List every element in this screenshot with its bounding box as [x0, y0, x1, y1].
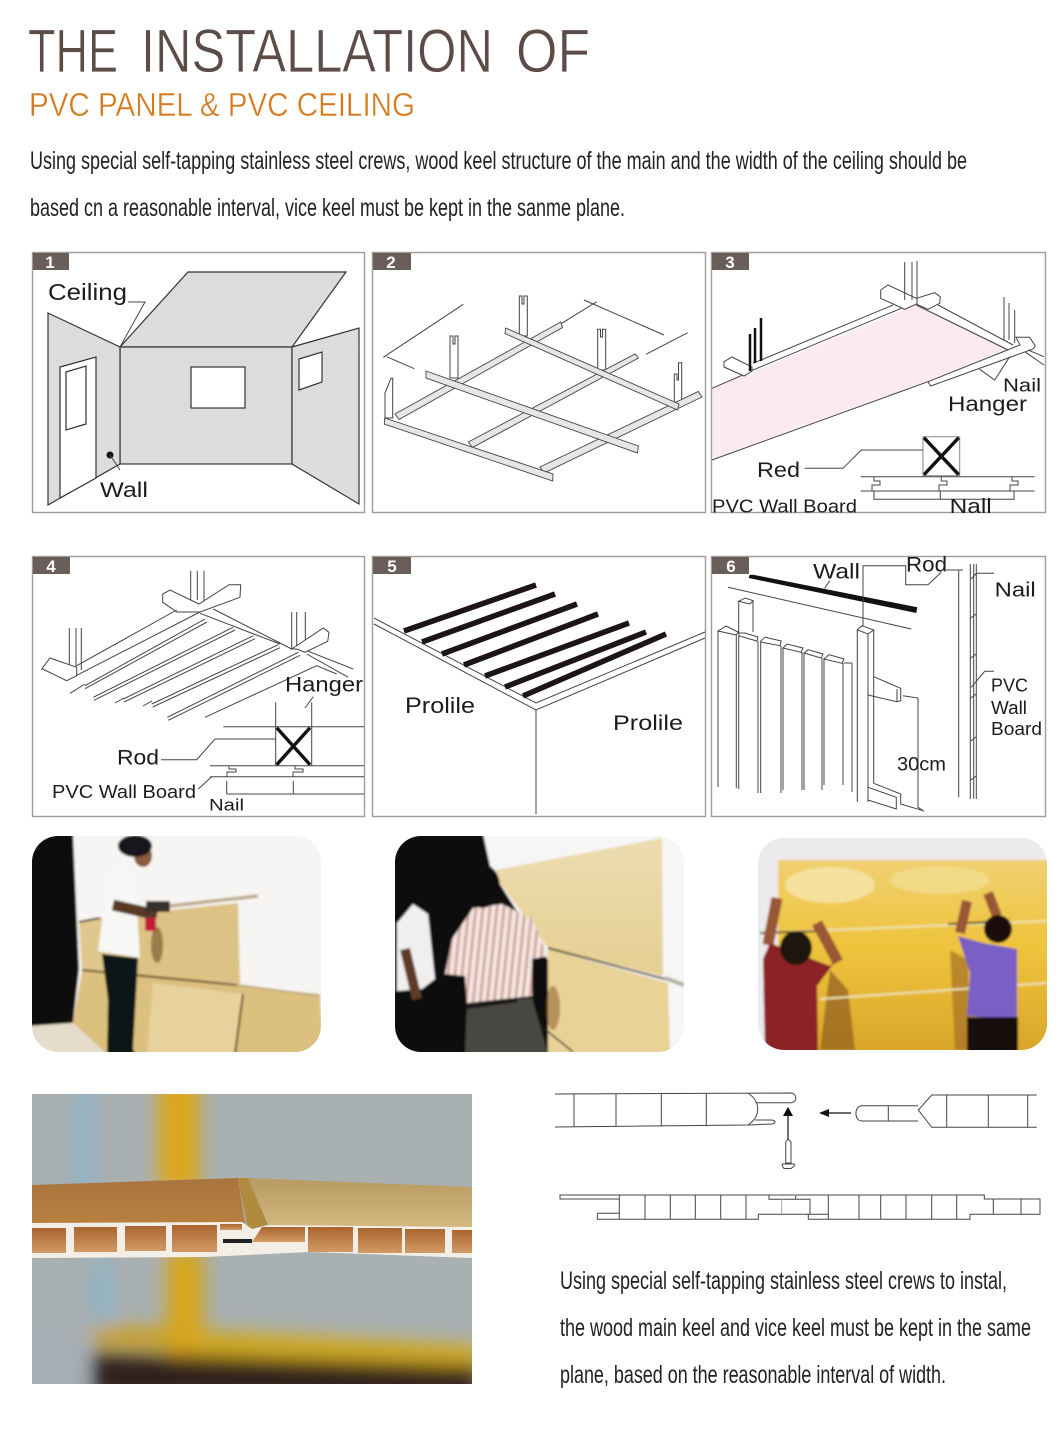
profile joint diagram: [555, 1093, 1037, 1168]
panel 4: hanger and rods: 4: [46, 557, 56, 576]
panel 1: room diagram: Wall: [100, 479, 148, 502]
closing text: [560, 1267, 1031, 1389]
assembled profile diagram: [560, 1195, 1040, 1219]
intro text: [30, 147, 967, 222]
arrow: up with screw: [782, 1107, 794, 1168]
photo: two workers on yellow wall: [756, 836, 1049, 1052]
panel 3: ceiling board with hanger: Nail: [1003, 376, 1041, 396]
title: INSTALLATION: [141, 17, 493, 85]
panel 1: room diagram: Ceiling: [48, 279, 127, 305]
panel 5: profile rods: Prolile: [613, 712, 683, 735]
photo: two workers fitting panel: [393, 834, 686, 1054]
title: OF: [516, 17, 590, 85]
panel 5: profile rods: 5: [387, 557, 397, 576]
panel 3: ceiling board with hanger: Hanger: [948, 393, 1027, 416]
panel 3: ceiling board with hanger: PVC Wall Board: [712, 497, 857, 517]
panel 6: wall battens: 6: [726, 557, 736, 576]
panel 1: room diagram: 1: [45, 253, 55, 272]
arrow: left: [819, 1109, 851, 1117]
panel 2: ceiling grid: [372, 252, 706, 512]
panel 3: ceiling board with hanger: [712, 252, 1046, 518]
panel 4: hanger and rods: [32, 556, 364, 816]
panel 5: profile rods: [372, 556, 706, 816]
panel 6: wall battens: Wall: [991, 698, 1027, 718]
cross-section of rod and board: [161, 697, 364, 794]
panel 6: wall battens: PVC: [991, 676, 1028, 696]
panel 1: room diagram: [32, 252, 364, 512]
subtitle: PVC PANEL & PVC CEILING: [29, 86, 415, 123]
photo: panel cross-section close-up: [32, 1094, 472, 1384]
panel 5: profile rods: Prolile: [405, 693, 475, 718]
photo: worker drilling panel: [30, 834, 323, 1054]
panel 4: hanger and rods: Hanger: [285, 673, 363, 696]
panel 3: ceiling board with hanger: 3: [725, 253, 735, 272]
panel 2: ceiling grid: 2: [386, 253, 396, 272]
panel 6: wall battens: [712, 554, 1046, 816]
panel 3: ceiling board with hanger: Nall: [950, 496, 992, 518]
panel 6: wall battens: Wall: [813, 560, 860, 583]
panel 4: hanger and rods: Rod: [117, 747, 159, 770]
panel 4: hanger and rods: Nail: [209, 796, 244, 815]
panel 6: wall battens: 30cm: [897, 755, 946, 776]
intro text: based cn a reasonable interval, vice keel must be kept in the sanme plane.: [30, 194, 625, 222]
cross-section of rod and board: [805, 437, 1035, 499]
panel 6: wall battens: Nail: [995, 580, 1036, 602]
panel 3: ceiling board with hanger: Red: [757, 459, 800, 482]
title: THE: [28, 17, 118, 85]
panel 6: wall battens: Rod: [906, 554, 947, 577]
panel 4: hanger and rods: PVC Wall Board: [52, 782, 196, 802]
panel 6: wall battens: Board: [991, 719, 1042, 739]
